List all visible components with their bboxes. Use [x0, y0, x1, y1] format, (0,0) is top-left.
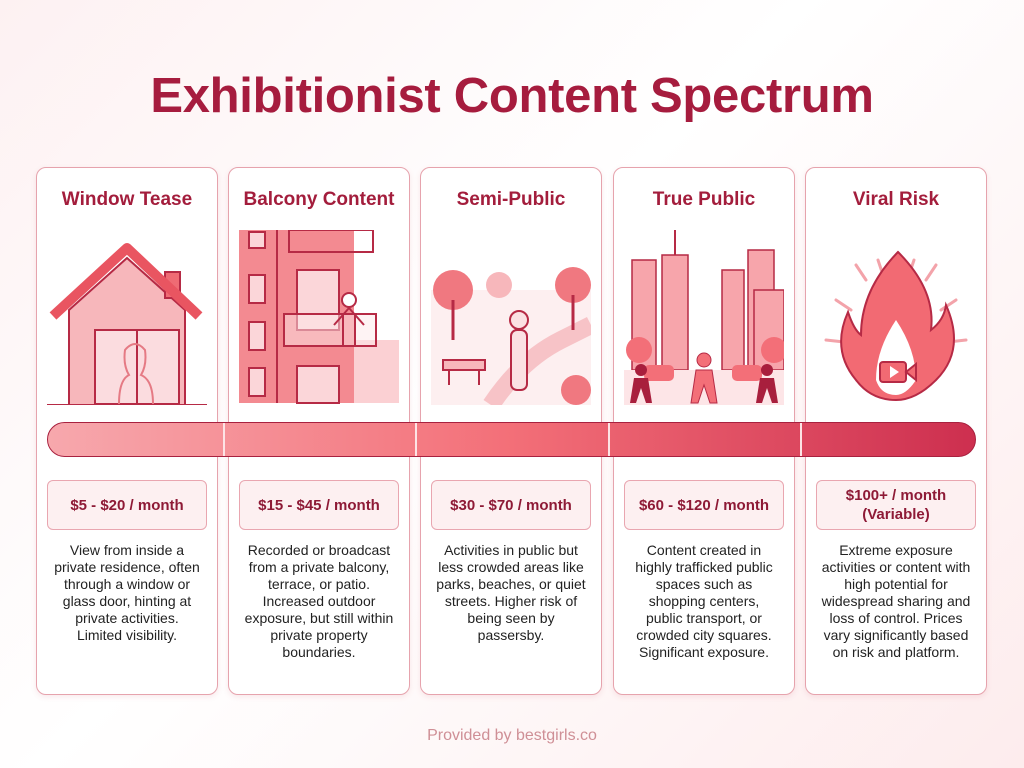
price — [816, 480, 976, 530]
description: Extreme exposure activities or content with high potential for widespread sharing and loss of control. Prices vary significantly based on risk and platform. — [822, 542, 970, 660]
price — [239, 480, 399, 530]
spectrum bar — [47, 422, 976, 457]
price — [47, 480, 207, 530]
description: View from inside a private residence, often through a window or glass door, hinting at private activities. Limited visibility. — [54, 542, 200, 643]
description: Content created in highly trafficked public spaces such as shopping centers, public transport, or crowded city squares. Significant exposure. — [635, 542, 773, 660]
panel: window tease: Window Tease — [62, 189, 192, 210]
price — [624, 480, 784, 530]
icon: park — [431, 267, 591, 405]
panel: viral risk — [805, 167, 987, 695]
title: Exhibitionist Content Spectrum — [150, 69, 874, 123]
icon: fire — [824, 250, 968, 401]
price: $30 - $70 / month — [450, 496, 572, 514]
price: $100+ / month — [846, 487, 946, 504]
panel: balcony — [228, 167, 410, 695]
description: Recorded or broadcast from a private balcony, terrace, or patio. Increased outdoor exposure, but still within private property boundaries. — [245, 542, 393, 660]
price: $15 - $45 / month — [258, 496, 380, 514]
price: $60 - $120 / month — [639, 496, 769, 514]
price: (Variable) — [862, 506, 930, 523]
panel: viral risk: Viral Risk — [853, 189, 939, 210]
panel: true public — [613, 167, 795, 695]
panel: true public: True Public — [653, 189, 755, 210]
panel: semi-public — [420, 167, 602, 695]
icon: house — [47, 243, 207, 405]
panel: semi-public: Semi-Public — [457, 189, 565, 210]
description: Activities in public but less crowded areas like parks, beaches, or quiet streets. Higher risk of being seen by passersby. — [436, 542, 586, 643]
price: $5 - $20 / month — [70, 496, 184, 514]
price — [431, 480, 591, 530]
icon: balcony — [239, 230, 399, 404]
panel: balcony: Balcony Content — [244, 189, 394, 210]
panel: window tease — [36, 167, 218, 695]
footer: Provided by bestgirls.co — [427, 727, 597, 744]
icon: city — [624, 230, 784, 405]
